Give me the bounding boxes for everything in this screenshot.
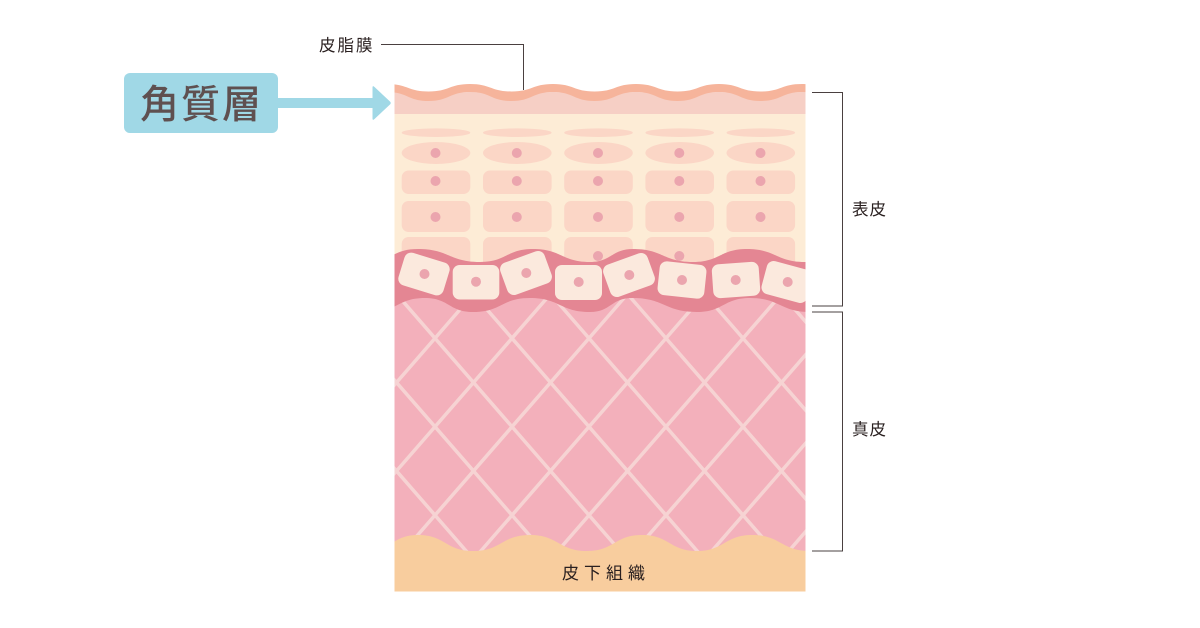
cell row 3 [402,170,795,194]
layer: epidermis base [394,114,806,262]
epidermis cells [402,128,795,262]
arrow: points to stratum corneum [270,86,391,120]
basal cell nuclei [420,268,793,287]
layer: stratum corneum [394,92,806,114]
label box [124,73,278,133]
layer: basal membrane band [394,249,806,312]
bracket: dermis [812,312,887,551]
label: subcutaneous tissue: 皮下組織 [562,564,650,583]
layer: dermis [394,295,806,560]
collagen lattice [394,298,806,551]
cell nuclei [430,148,766,261]
leader line [381,44,524,90]
leader: sebum film [319,36,524,90]
label: dermis: 真皮 [852,420,887,439]
basal cells [397,249,814,305]
diagram: skin cross-section [394,84,806,592]
label: sebum film: 皮脂膜 [319,36,374,55]
layer: subcutaneous fat [366,535,810,592]
layer: sebum film [387,84,843,101]
cell row 1 [402,128,795,137]
label: stratum corneum callout [124,73,391,133]
label: epidermis: 表皮 [852,200,887,219]
cell row 2 [402,142,795,164]
cell row 5 [402,237,795,262]
bracket: epidermis [812,92,887,306]
cell row 4 [402,201,795,232]
label text: 角質層 [140,84,263,127]
